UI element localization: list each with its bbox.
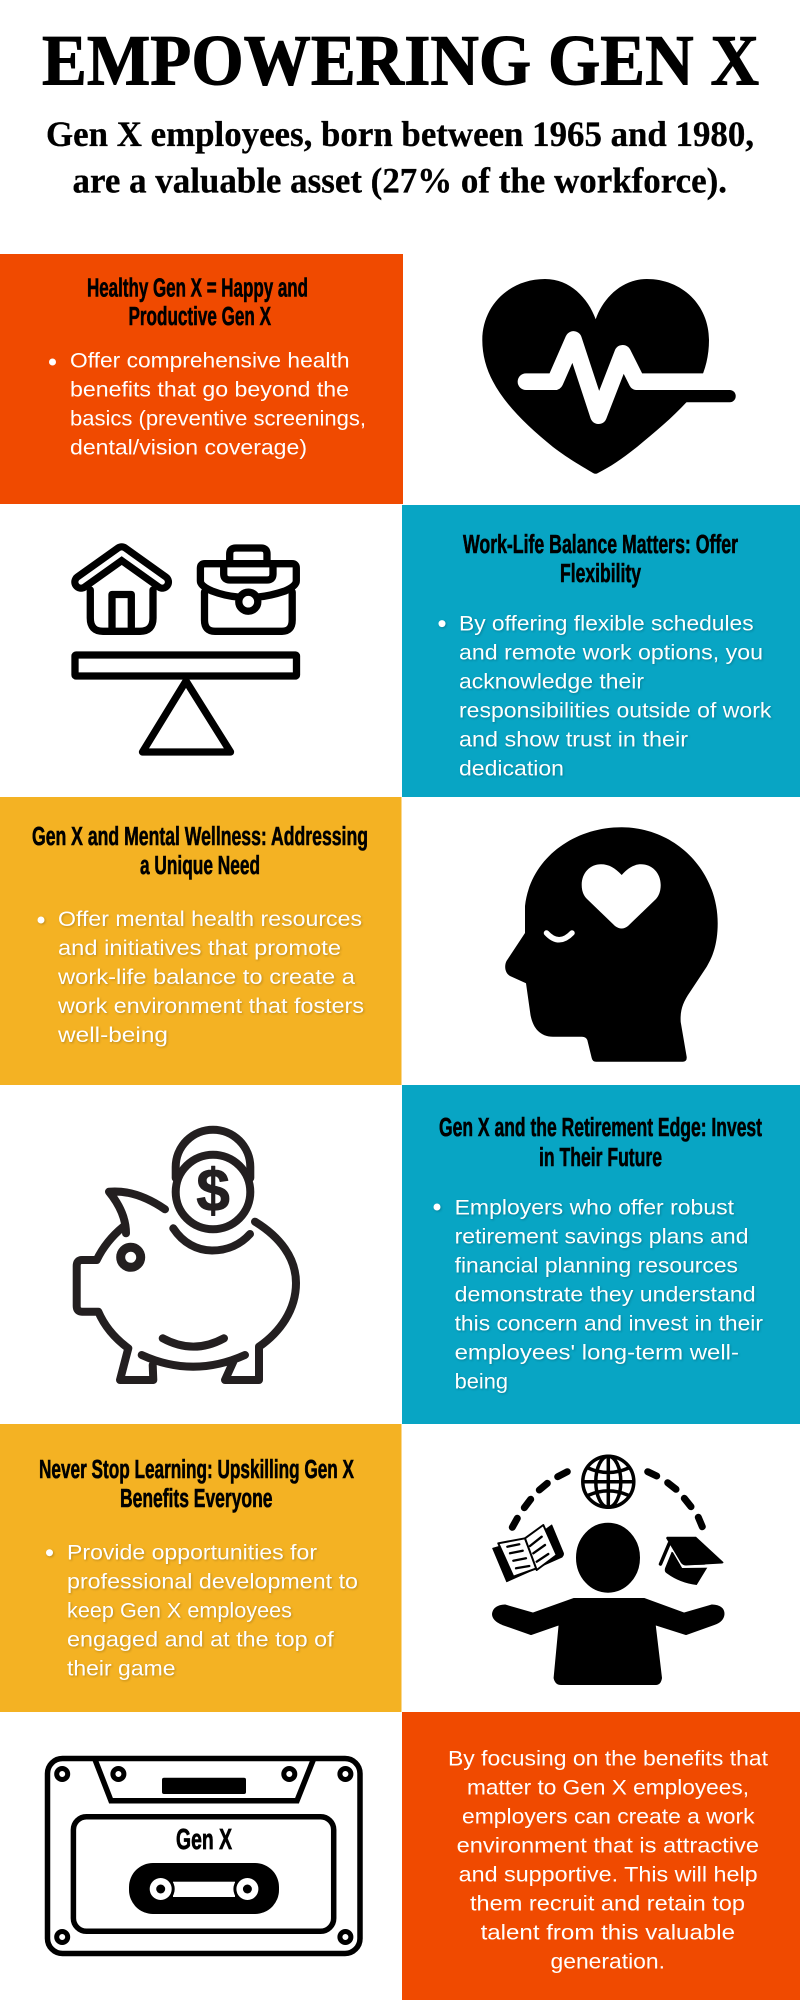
bullet text: flexibility: and remote work options, you: [459, 641, 763, 665]
conclusion text: and supportive. This will help: [459, 1863, 758, 1887]
bullet text: health benefits: basics (preventive screenings,: [70, 407, 366, 431]
heading: mental wellness: Gen X and Mental Wellness: Addressing: [32, 823, 368, 851]
bullet text: mental health: work environment that fosters: [57, 994, 364, 1018]
panel: mental wellness: [0, 797, 402, 1085]
panel: conclusion: [402, 1712, 800, 2000]
icon: home and work balance scale: [75, 548, 296, 752]
bullet text: flexibility: and show trust in their: [459, 728, 688, 752]
dashed arc: [512, 1472, 702, 1527]
bullet text: health benefits: Offer comprehensive health: [70, 349, 350, 373]
conclusion text: them recruit and retain top: [470, 1892, 745, 1916]
heading: healthy Gen X: Healthy Gen X = Happy and: [87, 275, 308, 303]
bullet text: flexibility: dedication: [459, 756, 564, 780]
icon: head with heart: [505, 827, 718, 1062]
icon: piggy bank with coins: [77, 1130, 296, 1380]
icon: cassette tape: [48, 1758, 360, 1954]
bullet text: flexibility: [438, 612, 772, 780]
bullet text: health benefits: benefits that go beyond the: [70, 378, 349, 402]
heading: work-life balance: [463, 531, 738, 588]
bullet text: retirement plans: Employers who offer robust: [455, 1196, 734, 1220]
conclusion text: generation.: [550, 1950, 665, 1974]
bullet text: flexibility: By offering flexible schedules: [459, 612, 754, 636]
icon: person juggling learning items: [493, 1456, 724, 1684]
conclusion text: By focusing on the benefits that: [448, 1747, 768, 1771]
panel: retirement edge: [402, 1085, 800, 1424]
heading: healthy Gen X: [87, 275, 308, 331]
conclusion text: [448, 1747, 768, 1974]
bullet text: mental health: and initiatives that promote: [58, 936, 341, 960]
bullet text: development: professional development to: [67, 1570, 358, 1594]
bullet text: retirement plans: employees' long-term well-: [455, 1341, 739, 1365]
bullet text: retirement plans: [434, 1196, 763, 1394]
panel: work-life balance: [402, 505, 800, 797]
panel: upskilling: [0, 1424, 402, 1712]
panel: healthy Gen X: [0, 254, 403, 504]
conclusion text: talent from this valuable: [481, 1921, 735, 1945]
subtitle: [46, 114, 754, 201]
bullet text: development: engaged and at the top of: [67, 1628, 334, 1652]
heading: upskilling: Benefits Everyone: [120, 1485, 272, 1513]
bullet text: health benefits: [49, 349, 366, 460]
heading: mental wellness: a Unique Need: [140, 852, 260, 880]
bullet text: retirement plans: being: [455, 1370, 508, 1394]
bullet text: flexibility: responsibilities outside of work: [459, 698, 772, 722]
bullet text: retirement plans: financial planning resources: [455, 1254, 738, 1278]
bullet text: development: [46, 1541, 358, 1681]
heading: upskilling: Never Stop Learning: Upskilling Gen X: [39, 1456, 354, 1484]
heading: retirement edge: in Their Future: [539, 1144, 662, 1172]
conclusion text: matter to Gen X employees,: [467, 1776, 749, 1800]
cassette reels: [129, 1863, 279, 1914]
icon: heart with pulse: [482, 279, 736, 474]
bullet text: mental health: [38, 907, 364, 1047]
icon: open book: [493, 1525, 563, 1582]
bullet text: development: Provide opportunities for: [67, 1541, 317, 1565]
bullet text: development: their game: [67, 1657, 176, 1681]
bullet text: mental health: well-being: [57, 1023, 168, 1047]
icon: graduation cap: [660, 1537, 723, 1585]
cassette label: Gen X: [176, 1824, 232, 1856]
title: EMPOWERING GEN X: [42, 20, 759, 100]
bullet text: retirement plans: retirement savings plans and: [455, 1225, 748, 1249]
bullet text: development: keep Gen X employees: [67, 1599, 292, 1623]
bullet text: health benefits: dental/vision coverage): [70, 436, 307, 460]
heading: healthy Gen X: Productive Gen X: [128, 303, 271, 331]
conclusion text: environment that is attractive: [457, 1834, 759, 1858]
heading: upskilling: [39, 1456, 354, 1513]
icon: globe: [583, 1456, 634, 1507]
subtitle: Gen X employees, born between 1965 and 1980,: [46, 114, 754, 154]
heading: work-life balance: Flexibility: [560, 560, 642, 588]
bullet text: retirement plans: this concern and invest in their: [455, 1312, 763, 1336]
icon: dollar sign: $: [196, 1157, 230, 1224]
bullet text: flexibility: acknowledge their: [459, 669, 644, 693]
bullet text: retirement plans: demonstrate they understand: [455, 1283, 756, 1307]
subtitle: are a valuable asset (27% of the workforce).: [72, 161, 727, 201]
bullet text: mental health: Offer mental health resources: [58, 907, 362, 931]
person: [493, 1524, 724, 1684]
bullet text: mental health: work-life balance to create a: [57, 965, 355, 989]
conclusion text: employers can create a work: [462, 1805, 755, 1829]
heading: mental wellness: [32, 823, 368, 880]
heading: retirement edge: [439, 1114, 762, 1172]
